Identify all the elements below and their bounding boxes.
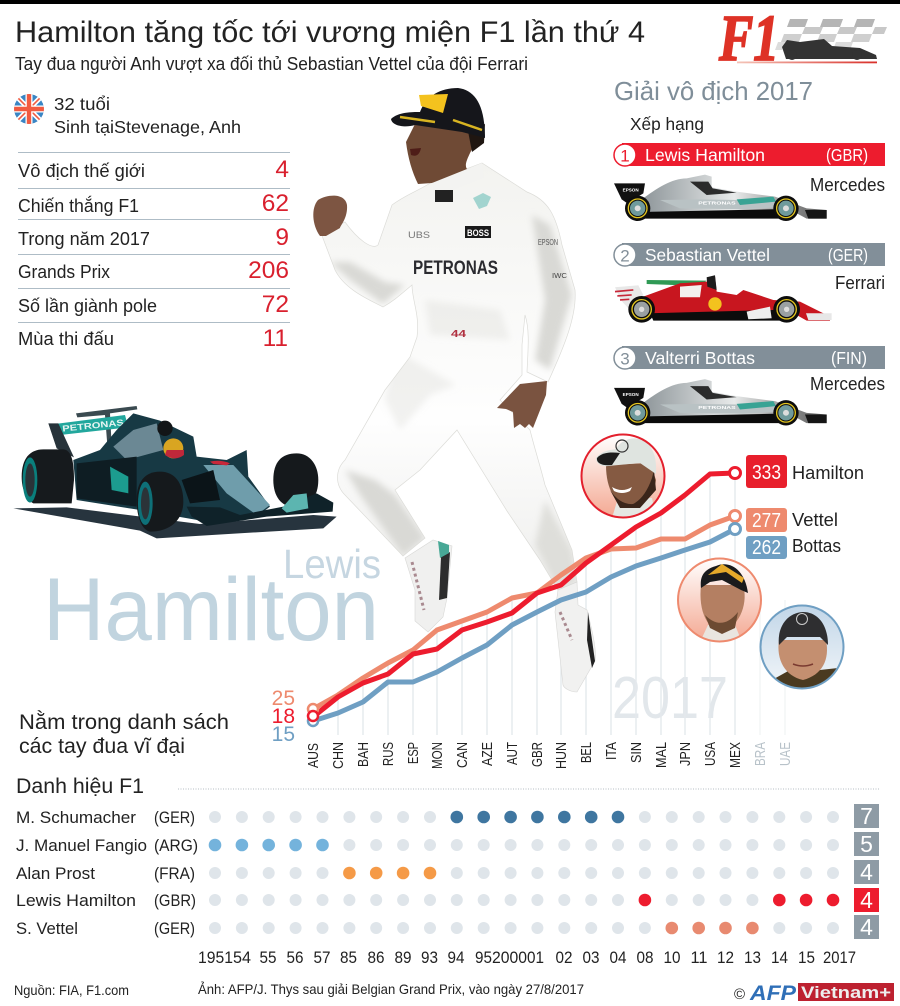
titles: Vettel row xyxy=(16,914,879,940)
photo: Lewis Hamilton jumping: 44 xyxy=(451,329,467,340)
titles: Prost row xyxy=(16,859,879,885)
text: great drivers note xyxy=(19,709,229,758)
driver bio: 32 tuổi xyxy=(54,94,110,114)
heading: F1 titles: Danh hiệu F1 xyxy=(16,775,144,798)
titles: Fangio row: J. Manuel Fangio xyxy=(16,836,147,855)
titles: year axis: 10 xyxy=(664,948,680,967)
chart axis labels: race names: BRA xyxy=(752,742,769,766)
titles: year axis: 14 xyxy=(771,948,788,967)
chart axis labels: race names: HUN xyxy=(553,742,570,769)
chart axis labels: race names: ITA xyxy=(603,742,620,760)
icon: UK flag xyxy=(14,94,44,124)
driver bio: Sinh tạiStevenage, Anh xyxy=(54,117,241,137)
titles: year axis: 89 xyxy=(394,948,412,967)
car: Mercedes rank 3: PETRONAS xyxy=(698,405,737,411)
car: Mercedes rank 3 xyxy=(614,379,827,425)
chart axis labels: race names: GBR xyxy=(529,742,546,767)
stats table xyxy=(18,152,290,352)
stats table: 9 xyxy=(275,224,289,251)
titles: year axis: 11 xyxy=(690,948,708,967)
titles: year axis: 13 xyxy=(744,948,761,967)
titles: year axis: 93 xyxy=(421,948,438,967)
badge: Vettel 277 points: 277 xyxy=(752,510,781,532)
titles: year axis: 12 xyxy=(717,948,734,967)
badge: Hamilton 333 points xyxy=(746,455,864,488)
stats table: Số lần giành pole xyxy=(18,296,157,316)
stats table: 4 xyxy=(275,156,289,183)
suit shading xyxy=(330,215,577,590)
photo credit: Ảnh: AFP/J. Thys sau giải Belgian Grand Prix, vào ngày 27/8/2017 xyxy=(198,981,584,997)
rank 3 row: Valterri Bottas xyxy=(645,348,755,368)
rank 1 row xyxy=(614,143,885,166)
team: Mercedes: Mercedes xyxy=(810,175,885,195)
stats table: Mùa thi đấu xyxy=(18,329,114,349)
chart axis labels: race names: BEL xyxy=(578,742,595,763)
titles: year axis: 04 xyxy=(610,948,626,967)
stats table: 62 xyxy=(262,190,289,217)
text: great drivers note: các tay đua vĩ đại xyxy=(19,734,185,758)
titles: year axis: 54 xyxy=(233,948,251,967)
chart axis labels: race names: CAN xyxy=(454,742,471,768)
team: Ferrari: Ferrari xyxy=(835,273,885,293)
titles: year axis xyxy=(198,948,856,967)
rank 2 row: (GER) xyxy=(828,245,868,265)
titles: year axis: 56 xyxy=(286,948,304,967)
titles: Prost row: Alan Prost xyxy=(16,864,95,883)
title: Hamilton tăng tốc tới vương miện F1 lần thứ 4 xyxy=(15,16,645,49)
source note: Nguồn: FIA, F1.com xyxy=(14,982,129,998)
chart axis labels: race names: USA xyxy=(702,742,719,766)
line: Hamilton xyxy=(313,473,735,717)
rank 2 row xyxy=(614,243,885,266)
cap xyxy=(391,88,485,138)
stats table: 72 xyxy=(262,291,289,318)
chart axis labels: race names: AUT xyxy=(504,742,521,765)
titles: year axis: 02 xyxy=(556,948,572,967)
photo: Mercedes race car: PETRONAS xyxy=(62,417,124,434)
chart axis labels: race names: BAH xyxy=(355,742,372,767)
titles: year axis: 2000 xyxy=(492,948,527,967)
stats table: Vô địch thế giới xyxy=(18,161,145,181)
heading: 2017 championship: Giải vô địch 2017 xyxy=(614,76,813,106)
titles: year axis: 15 xyxy=(798,948,815,967)
logo: AFP Vietnam+: AFP xyxy=(749,982,797,1005)
titles: year axis: 94 xyxy=(448,948,464,967)
large name: Lewis: Lewis xyxy=(283,541,381,587)
chart axis labels: race names xyxy=(305,742,794,769)
rank 1 row: Lewis Hamilton xyxy=(645,145,765,165)
chart start markers xyxy=(308,704,318,726)
titles: Hamilton row: (GBR) xyxy=(154,891,196,910)
logo: AFP Vietnam+: © xyxy=(734,986,745,1003)
photo: Mercedes race car xyxy=(13,406,337,538)
portrait: Hamilton xyxy=(582,434,664,518)
badge: Bottas 262 points xyxy=(746,536,841,559)
stats table: 11 xyxy=(263,325,288,352)
photo: Lewis Hamilton jumping: EPSON xyxy=(538,238,558,247)
collar xyxy=(432,163,484,198)
photo: Lewis Hamilton jumping: IWC xyxy=(552,273,567,280)
front shoe xyxy=(405,540,452,632)
car: Ferrari xyxy=(615,275,832,323)
titles: year axis: 95 xyxy=(475,948,492,967)
icon: F1 logo: F1 xyxy=(718,2,779,75)
starting scores xyxy=(272,687,295,746)
top black bar xyxy=(0,0,900,4)
titles: Prost row: (FRA) xyxy=(154,864,195,883)
stats table: Grands Prix xyxy=(18,262,110,282)
hand xyxy=(497,381,547,428)
titles: Prost row: 4 xyxy=(860,859,873,885)
starting scores: 15 xyxy=(272,723,295,746)
portrait: Bottas xyxy=(760,606,844,690)
subtitle: Tay đua người Anh vượt xa đối thủ Sebastian Vettel của đội Ferrari xyxy=(15,54,528,74)
chart axis labels: race names: MON xyxy=(429,742,446,769)
chart axis labels: race names: UAE xyxy=(777,742,794,766)
car: Mercedes rank 1 xyxy=(614,175,827,221)
chart axis labels: race names: RUS xyxy=(380,742,397,766)
heading: ranking: Xếp hạng xyxy=(630,114,704,134)
titles: Hamilton row: 4 xyxy=(860,887,873,913)
rank 1 row: (GBR) xyxy=(826,145,868,165)
titles: year axis: 03 xyxy=(582,948,600,967)
chart axis labels: race names: AUS xyxy=(305,743,322,768)
titles: year axis: 57 xyxy=(314,948,330,967)
chart axis labels: race names: CHN xyxy=(330,742,347,769)
titles: Schumacher row: M. Schumacher xyxy=(16,808,136,827)
badge: Hamilton 333 points: 333 xyxy=(752,462,781,484)
photo: Lewis Hamilton jumping: UBS xyxy=(408,230,430,240)
titles: year axis: 1951 xyxy=(198,948,233,967)
chart end markers xyxy=(730,468,740,534)
titles table: grey dots xyxy=(209,811,839,934)
badge: Vettel 277 points: Vettel xyxy=(792,510,838,530)
titles: Vettel row: S. Vettel xyxy=(16,919,78,938)
line chart: 2017 points xyxy=(313,473,735,721)
badge: Vettel 277 points xyxy=(746,508,838,532)
text: great drivers note: Nằm trong danh sách xyxy=(19,709,229,734)
chart axis labels: race names: JPN xyxy=(677,742,694,766)
portrait: Vettel xyxy=(678,558,761,642)
titles: year axis: 86 xyxy=(368,948,384,967)
stats table: Trong năm 2017 xyxy=(18,229,150,249)
starting scores: 25 xyxy=(272,687,295,710)
rank 3 row xyxy=(614,346,885,369)
rank 2 row: Sebastian Vettel xyxy=(645,245,770,265)
titles: year axis: 85 xyxy=(340,948,357,967)
icon: F1 logo xyxy=(718,2,887,75)
back shoe xyxy=(555,582,595,692)
logo: AFP Vietnam+: Vietnam+ xyxy=(801,983,891,1002)
sponsor marks: PETRONAS xyxy=(413,258,498,279)
badge: Bottas 262 points: 262 xyxy=(752,537,781,559)
chart gridlines xyxy=(338,473,785,735)
rank 3 row: (FIN) xyxy=(831,348,867,368)
starting scores: 18 xyxy=(272,705,295,728)
chart axis labels: race names: MEX xyxy=(727,742,744,768)
rank 3 row: 3 xyxy=(620,350,630,368)
line: Bottas xyxy=(313,529,735,721)
chart axis labels: race names: ESP xyxy=(405,742,422,764)
large name: Hamilton: Hamilton xyxy=(43,559,379,659)
titles: Fangio row: (ARG) xyxy=(154,836,198,855)
driver bio xyxy=(54,94,241,137)
rank 2 row: 2 xyxy=(620,246,630,266)
titles: Vettel row: 4 xyxy=(860,914,873,940)
team: Mercedes: Mercedes xyxy=(810,374,885,394)
photo: Lewis Hamilton jumping: BOSS xyxy=(467,228,489,238)
titles: year axis: 2017 xyxy=(823,948,856,967)
chart watermark year: 2017 xyxy=(612,665,728,731)
chart axis labels: race names: AZE xyxy=(479,742,496,766)
titles: year axis: 08 xyxy=(636,948,654,967)
chart axis labels: race names: MAL xyxy=(653,742,670,768)
badge: Bottas 262 points: Bottas xyxy=(792,536,841,556)
line: Vettel xyxy=(313,516,735,709)
stats table: 206 xyxy=(248,257,289,284)
neck and face xyxy=(406,118,476,184)
suit xyxy=(321,163,577,590)
titles: year axis: 01 xyxy=(527,948,544,967)
stats table: Chiến thắng F1 xyxy=(18,195,139,216)
chart axis labels: race names: SIN xyxy=(628,742,645,763)
badge: Hamilton 333 points: Hamilton xyxy=(792,463,864,483)
rank 1 row: 1 xyxy=(620,146,630,166)
car: Mercedes rank 3: EPSON xyxy=(623,392,639,397)
titles: Hamilton row: Lewis Hamilton xyxy=(16,891,136,910)
titles: Schumacher row: (GER) xyxy=(154,808,195,827)
car: Mercedes rank 1: EPSON xyxy=(623,188,639,193)
titles: Fangio row: 5 xyxy=(860,831,873,857)
titles: Vettel row: (GER) xyxy=(154,919,195,938)
fist xyxy=(313,196,347,236)
car: Mercedes rank 1: PETRONAS xyxy=(698,200,737,206)
photo: Lewis Hamilton jumping xyxy=(313,88,595,692)
titles: Schumacher row: 7 xyxy=(860,803,873,829)
titles: Schumacher row xyxy=(16,803,879,829)
titles: year axis: 55 xyxy=(260,948,276,967)
logo: AFP Vietnam+ xyxy=(734,982,894,1005)
titles: Fangio row xyxy=(16,831,879,857)
titles: Hamilton row xyxy=(16,887,879,913)
